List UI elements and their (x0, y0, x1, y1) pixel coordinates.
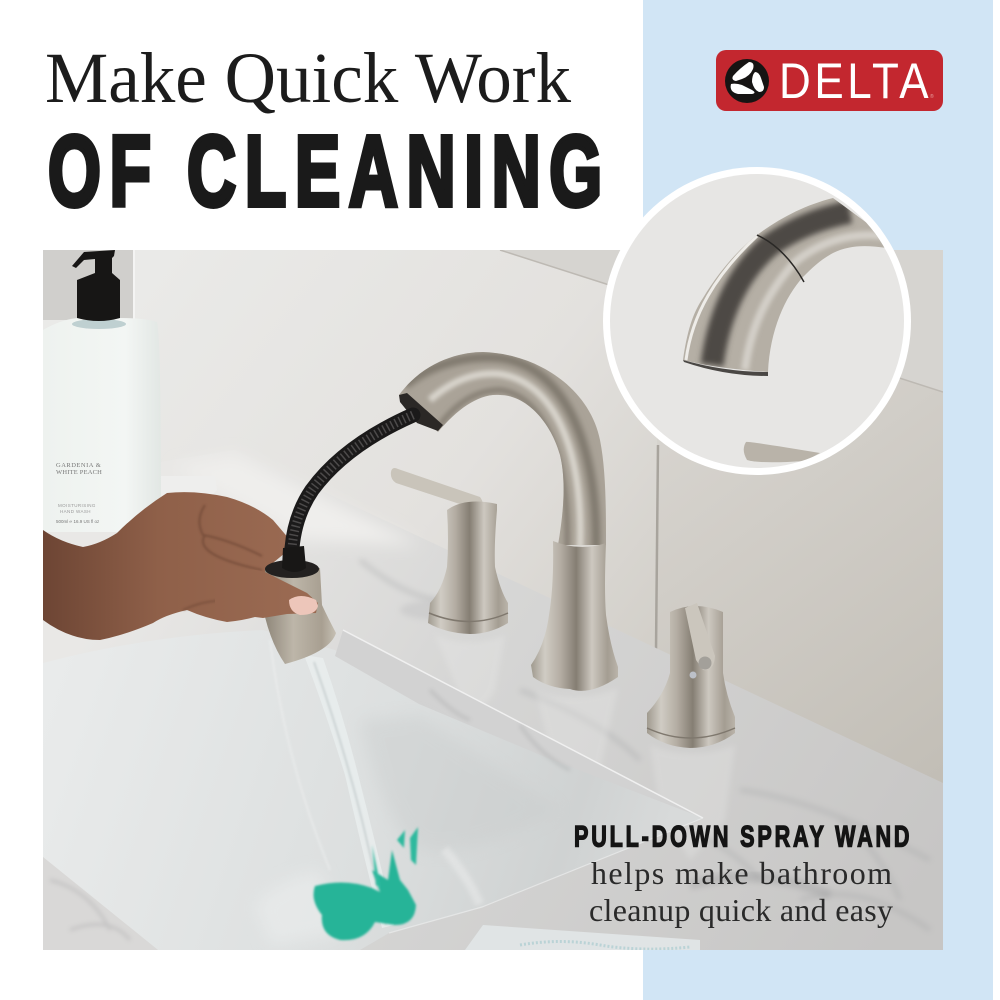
sink basin (55, 680, 684, 950)
basin shading (374, 728, 415, 784)
soap bottle: WHITE PEACH (56, 469, 102, 476)
green cleaning swirl (314, 827, 418, 940)
bottle label: GARDENIA & (56, 462, 101, 469)
soap bottle: 500ml ℮ 16.9 US fl oz (56, 519, 100, 524)
water stream (304, 655, 394, 928)
Delta logo: ® (930, 93, 934, 100)
thumb (215, 569, 318, 618)
left handle (391, 468, 508, 634)
spout opening rim (399, 393, 443, 431)
photo caption: helps make bathroom (591, 855, 892, 891)
marble corner, lower left (43, 858, 100, 950)
title line 2: OF CLEANING (48, 117, 602, 228)
faucet reflections on marble (539, 696, 728, 852)
leaflet on sink edge (465, 925, 700, 950)
faucet spout (399, 352, 606, 550)
title (45, 38, 602, 228)
foam around drain (284, 888, 321, 930)
soap bottle (43, 250, 161, 532)
zoom circle: spout detail (603, 167, 911, 475)
handle lever (685, 603, 715, 670)
photo caption: PULL-DOWN SPRAY WAND (574, 819, 910, 853)
product photo (43, 250, 943, 950)
right wall tile (723, 510, 943, 783)
logo wordmark: DELTA (779, 52, 929, 109)
soap dish (160, 476, 217, 512)
right handle (647, 603, 735, 748)
bottle pump (72, 250, 120, 321)
photo caption: cleanup quick and easy (589, 892, 893, 928)
blue side panel (643, 0, 993, 1000)
faucet column (531, 541, 618, 691)
soap bottle: HAND WASH (60, 509, 91, 514)
logo emblem (725, 59, 769, 103)
hand holding spray wand (43, 492, 290, 640)
handle close-up (744, 442, 820, 462)
soap bottle: MOISTURISING (58, 503, 96, 508)
spray wand head (265, 546, 336, 664)
photo caption (574, 819, 910, 928)
sink rim band (335, 631, 481, 728)
spout close-up (683, 198, 890, 376)
sink front edge (389, 818, 703, 933)
title line 1: Make Quick Work (45, 38, 571, 118)
marble counter (208, 464, 943, 950)
handle lever (390, 468, 482, 504)
Delta logo (716, 50, 943, 111)
braided hose (292, 415, 413, 548)
